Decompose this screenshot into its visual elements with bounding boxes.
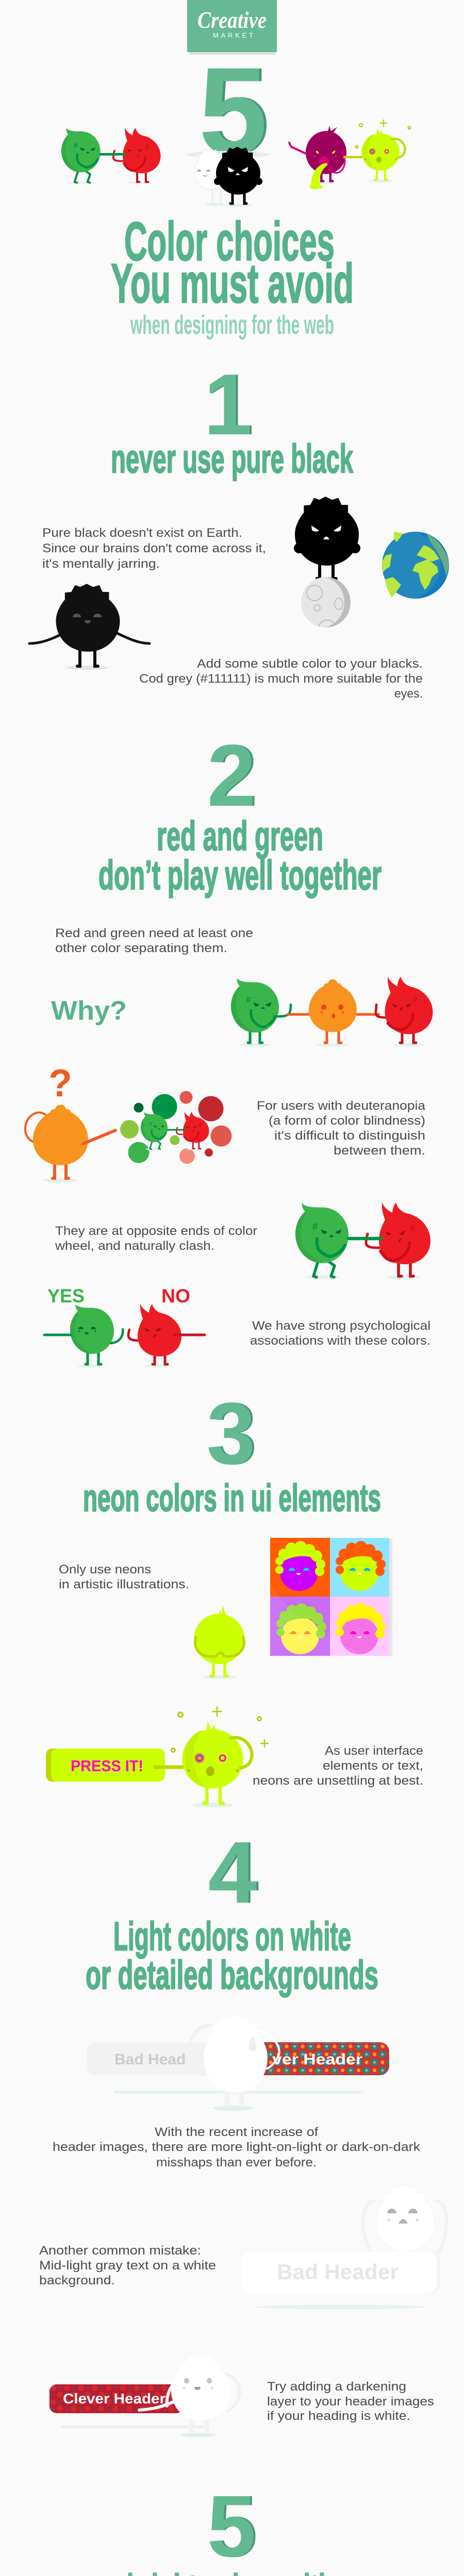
text: darkening layer: if your heading is white. <box>267 2409 410 2423</box>
header logo badge <box>187 0 277 55</box>
text: only use neons: Only use neons <box>59 1563 151 1577</box>
green, orange and red holding apart: # <box>412 995 418 1005</box>
black character on the moon <box>294 497 360 579</box>
text: deuteranopia: For users with deuteranopia <box>257 1099 426 1113</box>
text: subtle color <box>139 657 423 701</box>
heading 2: red and green <box>157 813 323 859</box>
colour blindness bubbles <box>120 1091 232 1164</box>
yes green character <box>44 1304 123 1367</box>
hero number 5: 5 <box>201 42 270 180</box>
text: darkening layer: Try adding a darkening <box>267 2380 406 2394</box>
earth <box>382 532 449 599</box>
number 1: 1 <box>204 356 252 453</box>
fighting green and red <box>295 1202 430 1279</box>
green, orange and red holding apart <box>231 977 433 1046</box>
text: common mistake: Another common mistake: <box>39 2244 201 2258</box>
number 3: 3 <box>207 1385 255 1483</box>
text: pure black <box>42 526 266 571</box>
text: unsettling neons: neons are unsettling at best. <box>253 1774 423 1788</box>
number 2: 2 <box>209 727 258 825</box>
text: unsettling neons: elements or text, <box>323 1759 423 1773</box>
neon character from behind <box>194 1605 244 1679</box>
text: common mistake: Mid-light gray text on a white <box>39 2259 216 2273</box>
cod grey character <box>29 584 150 670</box>
text: darkening layer <box>267 2380 434 2423</box>
number 3: 3 <box>209 1385 257 1483</box>
neon sparkles <box>171 1706 269 1752</box>
text: subtle color: Add some subtle color to your blacks. <box>197 657 423 671</box>
text: pure black: Pure black doesn't exist on Earth. <box>42 526 242 540</box>
question mark: ? <box>48 1061 72 1105</box>
hero: sick magenta character <box>289 126 346 189</box>
text: psychological associations: associations with these colors. <box>250 1334 430 1348</box>
hero: neon character with sparkles <box>344 120 410 182</box>
press it button <box>46 1749 165 1782</box>
header logo badge: Creative <box>197 7 267 33</box>
text: need another colour: other color separating them. <box>55 941 227 955</box>
text: subtle color: eyes. <box>394 687 423 701</box>
number 4: 4 <box>210 1824 259 1922</box>
text: header images: With the recent increase of <box>155 2125 318 2139</box>
text: deuteranopia: it's difficult to distinguish <box>274 1129 425 1143</box>
header logo badge: MARKET <box>213 31 253 39</box>
text: pure black: Since our brains don't come across it, <box>42 541 266 555</box>
hero: fighting green and red characters <box>61 128 161 184</box>
bad versus clever header with white character <box>87 2015 389 2111</box>
text: psychological associations: We have strong psychological <box>252 1319 430 1333</box>
hero number 5: 5 <box>198 42 268 180</box>
text: opposite ends: wheel, and naturally clash. <box>55 1239 214 1253</box>
text: darkening layer: layer to your header images <box>267 2395 434 2409</box>
text: common mistake <box>39 2244 216 2287</box>
text: pure black: it's mentally jarring. <box>42 557 160 571</box>
press it button: PRESS IT! <box>71 1757 143 1775</box>
moon <box>301 577 351 628</box>
text: header images <box>53 2125 421 2170</box>
text: need another colour: Red and green need at least one <box>55 926 253 940</box>
text: need another colour <box>55 926 253 955</box>
bad versus clever header with white character: ver Header <box>272 2051 362 2068</box>
text: unsettling neons <box>253 1744 423 1788</box>
YES and NO labels: YES <box>47 1285 85 1307</box>
number 5: 5 <box>209 2478 258 2575</box>
text: header images: misshaps than ever before. <box>156 2156 317 2170</box>
text: deuteranopia: (a form of color blindness) <box>269 1114 425 1128</box>
white character behind bad header card <box>241 2184 446 2309</box>
heading 2 <box>98 813 382 898</box>
clever header with white character: Clever Header <box>63 2391 165 2406</box>
text: deuteranopia <box>257 1099 426 1158</box>
text: common mistake: background. <box>39 2274 115 2287</box>
text: header images: header images, there are more light-on-light or dark-on-dark <box>53 2140 421 2154</box>
number 2: 2 <box>207 727 256 825</box>
heading 4 <box>86 1913 378 1997</box>
YES and NO labels: NO <box>161 1285 190 1307</box>
text: opposite ends <box>55 1224 257 1253</box>
white character behind bad header card: Bad Header <box>277 2260 399 2284</box>
Why label: Why? <box>51 996 127 1026</box>
text: unsettling neons: As user interface <box>325 1744 423 1758</box>
YES and NO labels <box>47 1285 190 1307</box>
text: only use neons <box>59 1563 189 1591</box>
pop art portrait <box>270 1538 392 1656</box>
main title <box>111 211 354 314</box>
text: psychological associations <box>250 1319 430 1348</box>
text: opposite ends: They are at opposite ends of color <box>55 1224 257 1238</box>
orange character pointing <box>25 1105 115 1182</box>
bad versus clever header with white character: Bad Head <box>114 2051 186 2068</box>
green, orange and red holding apart: # <box>246 995 251 1005</box>
clever header with white character <box>49 2355 240 2437</box>
text: deuteranopia: between them. <box>334 1144 425 1158</box>
number 5: 5 <box>207 2478 256 2575</box>
number 4: 4 <box>208 1824 257 1922</box>
text: only use neons: in artistic illustrations. <box>59 1578 189 1591</box>
no red character <box>128 1304 205 1367</box>
hero number 5 <box>186 68 271 158</box>
neon character pressing button <box>155 1721 252 1807</box>
text: subtle color: Cod grey (#111111) is much more suitable for the <box>139 672 423 686</box>
hero: white and black characters <box>195 147 262 207</box>
number 1: 1 <box>206 356 254 453</box>
